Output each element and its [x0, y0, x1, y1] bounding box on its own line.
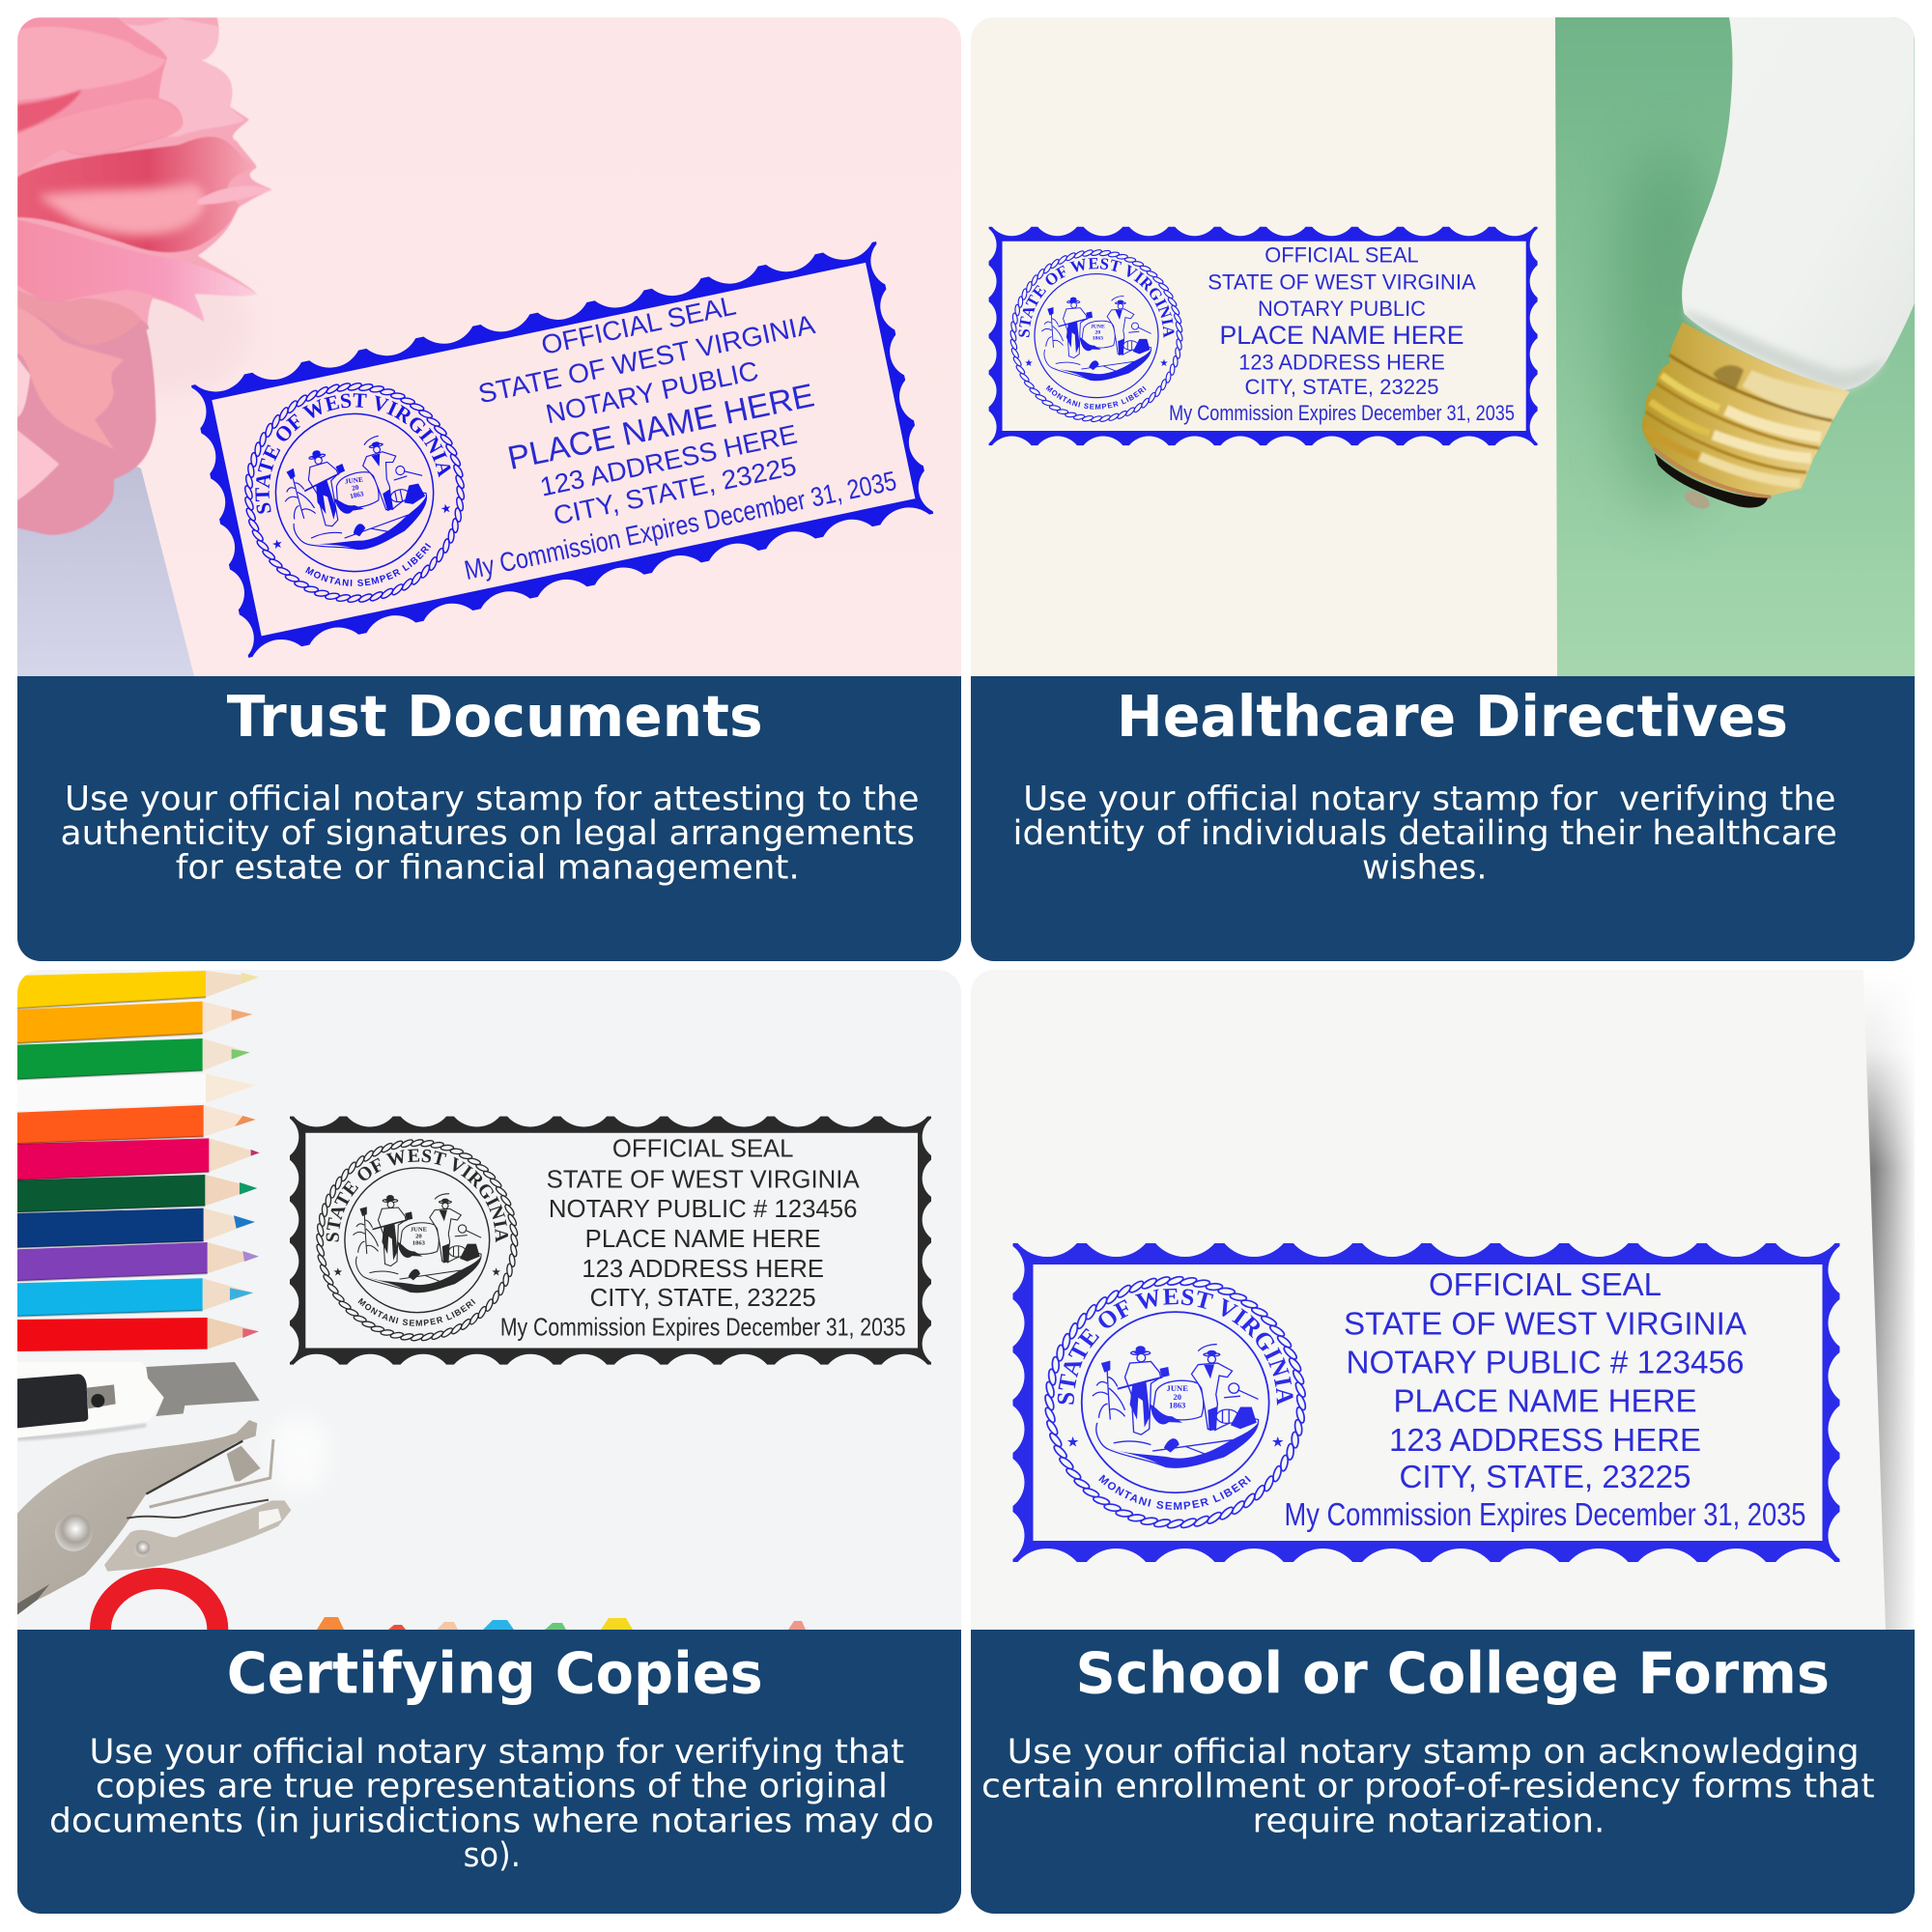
caption band [17, 1630, 961, 1914]
seal: 1863 [1169, 1401, 1185, 1410]
seal: JUNE [1167, 1383, 1188, 1393]
seal: STATE OF WEST VIRGINIA [1018, 258, 1175, 338]
body text: identity of individuals detailing their healthcare [1012, 814, 1837, 853]
stamp text: STATE OF WEST VIRGINIA [475, 309, 817, 409]
seal: JUNE [411, 1226, 428, 1233]
seal: ★ [333, 1265, 343, 1278]
scalloped border [1012, 1243, 1839, 1562]
seal: ★ [1024, 358, 1033, 369]
panel: Certifying Copies [17, 970, 961, 1914]
seal [1044, 1275, 1306, 1528]
stamp text: My Commission Expires December 31, 2035 [462, 466, 899, 585]
stamp text [1169, 243, 1515, 425]
seal: STATE OF WEST VIRGINIA [1057, 1289, 1293, 1406]
body text: Use your official notary stamp for verifying the [1023, 780, 1835, 818]
seal: STATE OF WEST VIRGINIA [327, 1150, 508, 1242]
seal [316, 1139, 518, 1341]
stamp text: CITY, STATE, 23225 [1399, 1459, 1690, 1494]
stamp text: OFFICIAL SEAL [1264, 243, 1419, 268]
stamp text [500, 1136, 906, 1342]
stamp text: My Commission Expires December 31, 2035 [1169, 401, 1515, 425]
stamp text: NOTARY PUBLIC # 123456 [549, 1196, 857, 1223]
body text: require notarization. [1253, 1803, 1605, 1841]
stamp text: CITY, STATE, 23225 [1244, 375, 1439, 399]
stamp text: CITY, STATE, 23225 [590, 1285, 816, 1312]
stamp text: OFFICIAL SEAL [612, 1136, 793, 1163]
stamp text: CITY, STATE, 23225 [551, 450, 799, 530]
stamp text: OFFICIAL SEAL [1429, 1266, 1662, 1302]
seal: MONTANI SEMPER LIBERI [1045, 384, 1147, 410]
stamp: large blue seal [1012, 1243, 1839, 1562]
panel: School or College Forms [971, 970, 1915, 1914]
heading: School or College Forms [1076, 1640, 1830, 1707]
stamp text: STATE OF WEST VIRGINIA [1208, 270, 1476, 295]
body text: copies are true representations of the original [96, 1768, 888, 1806]
seal: ★ [1066, 1435, 1079, 1450]
photo: white paper with shadow [971, 970, 1915, 1630]
panel: Trust Documents [17, 17, 961, 961]
body text: authenticity of signatures on legal arrangements [60, 814, 915, 853]
seal [1010, 249, 1182, 423]
stamp: blue straight seal [989, 226, 1538, 446]
stamp text: 123 ADDRESS HERE [582, 1256, 824, 1283]
seal [244, 383, 466, 603]
body text: so). [464, 1836, 521, 1875]
icon: utility knife [17, 1362, 292, 1630]
photo: pink paper with peony [17, 17, 961, 676]
seal: MONTANI SEMPER LIBERI [305, 543, 431, 586]
caption band [971, 1630, 1915, 1914]
seal: 20 [1095, 330, 1100, 336]
heading: Certifying Copies [227, 1640, 763, 1707]
body text: wishes. [1362, 849, 1488, 888]
scalloped border [191, 242, 933, 658]
seal: MONTANI SEMPER LIBERI [1098, 1474, 1251, 1510]
stamp text: My Commission Expires December 31, 2035 [500, 1313, 906, 1342]
photo: pencils and office tools [17, 970, 961, 1680]
seal: ★ [491, 1265, 501, 1278]
seal: ★ [1160, 358, 1169, 369]
icon: light bulb [1642, 17, 1915, 512]
seal: STATE OF WEST VIRGINIA [255, 393, 451, 514]
body text: Use your official notary stamp for verifying that [89, 1733, 904, 1772]
photo: cream paper, green card and light bulb [971, 17, 1915, 676]
body text [981, 1733, 1875, 1841]
stamp text: PLACE NAME HERE [1219, 321, 1464, 350]
body text [60, 780, 920, 888]
seal: 1863 [349, 490, 365, 500]
icon: crayon tips [317, 1617, 806, 1630]
seal: ★ [440, 501, 453, 517]
seal: JUNE [1091, 325, 1105, 330]
seal: MONTANI SEMPER LIBERI [357, 1298, 475, 1326]
stamp text: STATE OF WEST VIRGINIA [1344, 1305, 1747, 1341]
icon: coloured pencils [17, 971, 260, 1351]
panel: Healthcare Directives [971, 17, 1915, 961]
body text: Use your official notary stamp for attesting to the [65, 780, 920, 818]
seal: JUNE [345, 476, 363, 486]
body text: Use your official notary stamp on acknowledging [1008, 1733, 1860, 1772]
seal: ★ [1271, 1435, 1285, 1450]
scalloped border [290, 1117, 931, 1365]
stamp text: NOTARY PUBLIC [543, 355, 761, 429]
icon: red scissor handle [90, 1568, 228, 1630]
body text: for estate or financial management. [176, 849, 800, 888]
icon: peony petals [17, 17, 271, 535]
stamp text: 123 ADDRESS HERE [1238, 351, 1445, 375]
scalloped border [989, 227, 1538, 445]
stamp: blue rotated seal [191, 242, 933, 658]
icon: hole punch [17, 1420, 291, 1615]
stamp: black seal [290, 1117, 931, 1365]
stamp text: PLACE NAME HERE [1393, 1383, 1696, 1419]
stamp text: PLACE NAME HERE [585, 1226, 821, 1253]
body text [49, 1733, 934, 1875]
stamp text: 123 ADDRESS HERE [537, 419, 800, 502]
seal: 1863 [412, 1239, 426, 1246]
stamp text: OFFICIAL SEAL [539, 290, 739, 360]
stamp text: NOTARY PUBLIC [1258, 297, 1426, 321]
stamp text: My Commission Expires December 31, 2035 [1285, 1496, 1806, 1532]
stamp text: PLACE NAME HERE [504, 377, 817, 477]
body text: certain enrollment or proof-of-residency forms that [981, 1768, 1875, 1806]
heading: Healthcare Directives [1117, 683, 1788, 750]
body text [1016, 784, 1835, 879]
stamp text: STATE OF WEST VIRGINIA [547, 1167, 860, 1194]
seal: 20 [351, 483, 360, 493]
seal: 20 [415, 1233, 422, 1239]
seal: 1863 [1093, 336, 1103, 342]
stamp text [465, 298, 896, 582]
stamp text: 123 ADDRESS HERE [1389, 1422, 1701, 1458]
stamp text: NOTARY PUBLIC # 123456 [1347, 1345, 1745, 1380]
caption band [17, 676, 961, 961]
body text: documents (in jurisdictions where notaries may do [49, 1803, 934, 1841]
seal: ★ [270, 537, 284, 553]
heading: Trust Documents [227, 683, 763, 750]
caption band [971, 676, 1915, 961]
seal: 20 [1173, 1392, 1181, 1402]
stamp text [1285, 1266, 1806, 1532]
